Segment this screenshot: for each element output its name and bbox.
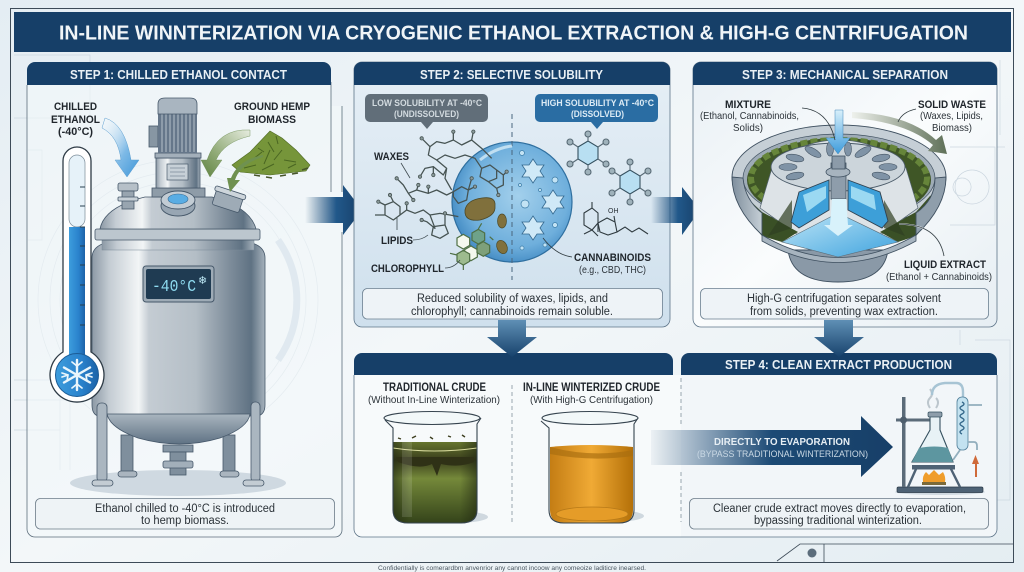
label: liquid extract: LIQUID EXTRACT — [904, 259, 986, 271]
illustration: centrifuge — [732, 110, 946, 282]
label: chilled ethanol — [51, 101, 100, 138]
display: -40°C — [152, 278, 196, 297]
callout: low solubility: (UNDISSOLVED) — [394, 109, 459, 120]
icon: stainless tank — [70, 98, 286, 496]
label: solid waste — [898, 99, 986, 134]
label: cannabinoids: CANNABINOIDS — [574, 252, 651, 264]
label: solid waste: SOLID WASTE — [918, 99, 986, 111]
label: ground hemp biomass — [234, 101, 310, 126]
callout: high solubility — [535, 94, 658, 129]
panel: step 2 — [354, 62, 670, 327]
label: cannabinoids: (e.g., CBD, THC) — [579, 264, 646, 276]
label: mixture: (Ethanol, Cannabinoids, — [700, 110, 799, 122]
label: lipids: LIPIDS — [381, 235, 413, 247]
footer note: Confidentially is comerardbm anvenrior any cannot incoow any comeoize laditicre inearsed. — [378, 566, 646, 572]
label: traditional crude — [368, 382, 500, 406]
callout: high solubility: HIGH SOLUBILITY AT -40°C — [541, 98, 654, 109]
illustration: dissolved cannabinoid rings — [567, 131, 651, 205]
icon: thermometer — [50, 147, 104, 402]
arrow: solid waste — [852, 112, 947, 154]
label: cannabinoids — [543, 238, 651, 276]
callout: low solubility: LOW SOLUBILITY AT -40°C — [372, 98, 482, 109]
callout: low solubility — [365, 94, 488, 129]
caption: step 2: chlorophyll; cannabinoids remain soluble. — [411, 306, 613, 318]
label: mixture: Solids) — [733, 122, 763, 134]
title bar — [14, 12, 1011, 52]
caption: step 4: Cleaner crude extract moves directly to evaporation, — [713, 503, 966, 515]
heading: STEP 2: SELECTIVE SOLUBILITY — [420, 67, 603, 82]
arrow: to evaporation: DIRECTLY TO EVAPORATION — [714, 436, 850, 448]
display: ❄ — [198, 275, 207, 287]
label: traditional crude: (Without In-Line Winterization) — [368, 394, 500, 406]
arrow: to evaporation — [651, 416, 893, 477]
display — [143, 266, 214, 302]
label: ground hemp biomass: BIOMASS — [248, 114, 296, 126]
heading: STEP 3: MECHANICAL SEPARATION — [742, 67, 948, 82]
caption: step 3 — [700, 288, 988, 319]
icon: amber beaker — [541, 412, 644, 523]
caption: step 2: Reduced solubility of waxes, lipids, and — [417, 293, 608, 305]
label: mixture — [700, 99, 835, 140]
arrow: ethanol feed — [102, 118, 139, 177]
caption: step 1: Ethanol chilled to -40°C is introduced — [95, 503, 275, 515]
label: waxes: WAXES — [374, 151, 409, 163]
caption: step 4 — [690, 498, 988, 529]
icon: dark beaker — [384, 412, 488, 523]
label: chilled ethanol: (-40°C) — [58, 126, 93, 138]
arrow: step 3 down — [814, 320, 864, 357]
label: lipids — [381, 218, 428, 247]
label: winterized crude — [523, 382, 660, 406]
label: liquid extract — [886, 224, 992, 283]
heading: STEP 1: CHILLED ETHANOL CONTACT — [70, 67, 287, 82]
illustration: chlorophyll molecule — [450, 223, 493, 270]
label: solid waste: Biomass) — [932, 122, 972, 134]
caption: step 1 — [36, 498, 334, 529]
caption: step 1: to hemp biomass. — [141, 515, 229, 527]
label: mixture: MIXTURE — [725, 99, 771, 111]
label: traditional crude: TRADITIONAL CRUDE — [383, 382, 486, 394]
panel: crude comparison — [354, 353, 681, 537]
caption: step 4: bypassing traditional winterization. — [754, 515, 922, 527]
panel: step 3 — [693, 62, 997, 327]
icon: evaporation apparatus — [895, 383, 985, 495]
label: chilled ethanol: ETHANOL — [51, 114, 100, 126]
arrow: to evaporation: (BYPASS TRADITIONAL WINTERIZATION) — [697, 449, 868, 460]
illustration: THC structure: OH — [608, 208, 618, 215]
label: winterized crude: (With High-G Centrifugation) — [530, 394, 653, 406]
label: waxes — [374, 151, 410, 178]
label: chlorophyll: CHLOROPHYLL — [371, 263, 444, 275]
arrow: step 2 down — [487, 320, 537, 357]
arrow: step 1 to 2 — [305, 185, 362, 235]
panel: step 1 — [27, 62, 342, 537]
label: solid waste: (Waxes, Lipids, — [920, 110, 983, 122]
label: chilled ethanol: CHILLED — [54, 101, 97, 113]
icon: hemp biomass pile — [232, 131, 310, 178]
callout: high solubility: (DISSOLVED) — [571, 109, 624, 120]
title: IN-LINE WINNTERIZATION VIA CRYOGENIC ETHANOL EXTRACTION & HIGH-G CENTRIFUGATION — [59, 22, 968, 44]
heading: STEP 4: CLEAN EXTRACT PRODUCTION — [725, 357, 952, 372]
illustration: waxes and lipids molecules — [375, 130, 508, 238]
caption: step 2 — [362, 288, 662, 319]
arrow: biomass feed — [201, 130, 263, 192]
icon: snowflake — [62, 360, 92, 390]
arrow: step 2 to 3 — [651, 187, 700, 235]
label: winterized crude: IN-LINE WINTERIZED CRUDE — [523, 382, 660, 394]
panel: step 4 — [681, 353, 997, 537]
title block — [777, 544, 1013, 562]
illustration: THC structure — [584, 202, 648, 236]
label: liquid extract: (Ethanol + Cannabinoids) — [886, 271, 992, 283]
illustration: solubility sphere — [452, 114, 572, 280]
caption: step 3: from solids, preventing wax extraction. — [750, 306, 938, 318]
caption: step 3: High-G centrifugation separates solvent — [747, 293, 942, 305]
label: ground hemp biomass: GROUND HEMP — [234, 101, 310, 113]
